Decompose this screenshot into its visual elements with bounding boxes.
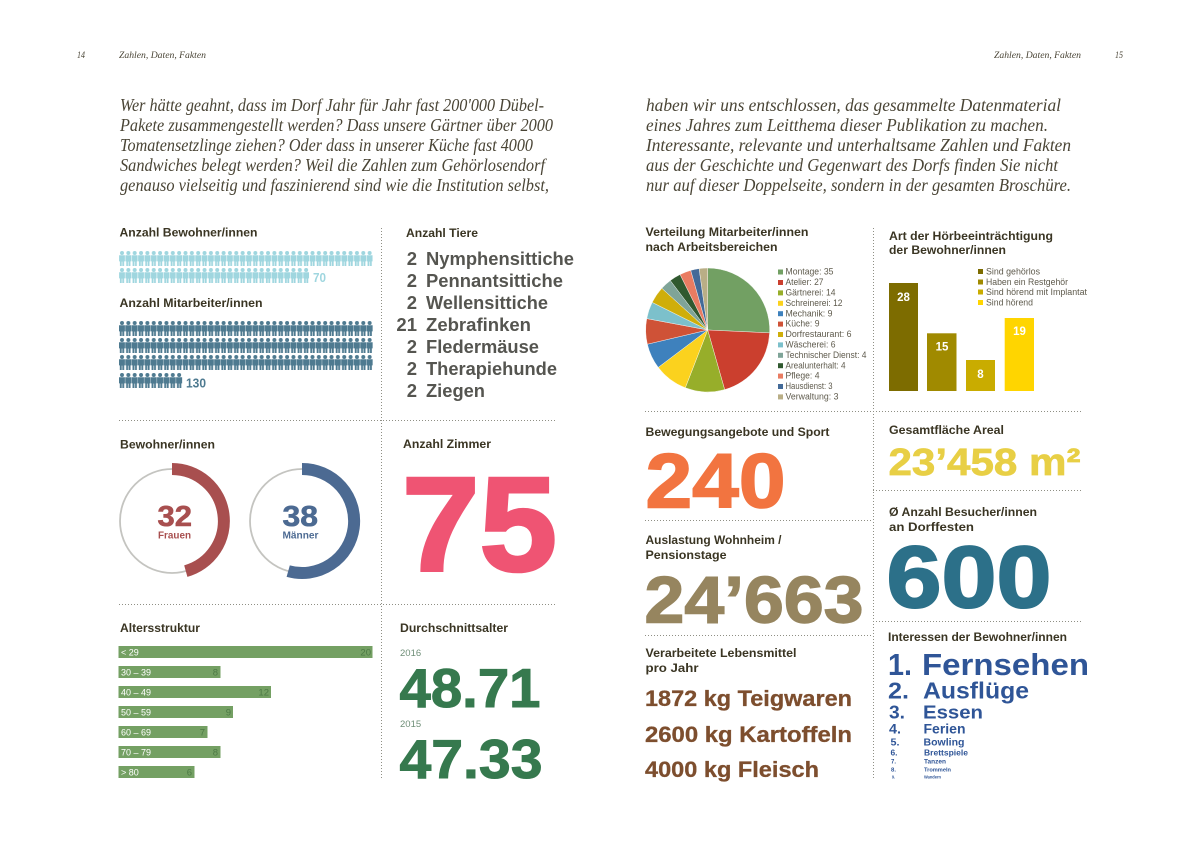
intro text left column: Sandwiches belegt werden? Weil die Zahlen zum Gehörlosendorf bbox=[120, 155, 547, 175]
bar chart: age groups: 12 bbox=[258, 688, 269, 698]
donut: Männer: Männer bbox=[282, 530, 318, 542]
pie legend: Pflege: 4 bbox=[786, 371, 820, 381]
heading: pro Jahr bbox=[646, 661, 699, 675]
animal list: 2 bbox=[407, 336, 417, 357]
bar chart: age groups: 50 – 59 bbox=[121, 708, 151, 718]
donut: Frauen: 32 bbox=[158, 501, 192, 533]
bar chart: age groups: 6 bbox=[187, 768, 192, 778]
intro text right column: haben wir uns entschlossen, das gesammelte Datenmaterial bbox=[646, 95, 1061, 115]
intro text right column: aus der Geschichte und Gegenwart des Dorfs finden Sie nicht bbox=[646, 155, 1059, 175]
big number 240: 240 bbox=[646, 438, 786, 524]
pie legend: Verwaltung: 3 bbox=[786, 392, 839, 402]
intro text left column: Tomatensetzlinge ziehen? Oder dass in unserer Küche fast 4000 bbox=[120, 135, 533, 155]
heading: Ø Anzahl Besucher/innen bbox=[889, 505, 1037, 519]
food quantities bbox=[645, 686, 852, 782]
ranked interests list: 3. bbox=[889, 702, 905, 722]
ranked interests list: Tanzen bbox=[924, 760, 946, 766]
bar chart: age groups: > 80 bbox=[121, 768, 139, 778]
ranked interests list: 5. bbox=[890, 736, 900, 748]
pie legend: Wäscherei: 6 bbox=[786, 340, 836, 350]
panel: Anzahl Besucher/innen bbox=[886, 505, 1052, 626]
heading: Anzahl Tiere bbox=[406, 226, 478, 240]
heading: Bewegungsangebote und Sport bbox=[646, 425, 830, 439]
intro text right column: nur auf dieser Doppelseite, sondern in der gesamten Broschüre. bbox=[646, 175, 1071, 195]
pie legend: Arealunterhalt: 4 bbox=[786, 360, 846, 370]
panel: Verarbeitete Lebensmittel bbox=[645, 646, 852, 782]
hearing legend bbox=[978, 266, 1088, 308]
animal list: Pennantsittiche bbox=[426, 270, 563, 291]
intro text left column: Pakete zusammengestellt werden? Dass unsere Gärtner über 2000 bbox=[119, 115, 553, 135]
pie chart bbox=[646, 268, 770, 392]
pie legend: Dorfrestaurant: 6 bbox=[786, 329, 852, 339]
page header right bbox=[994, 51, 1123, 61]
pie legend: Schreinerei: 12 bbox=[786, 298, 843, 308]
panel: Interessen der Bewohner/innen bbox=[888, 630, 1089, 780]
donut: Frauen: Frauen bbox=[158, 530, 191, 542]
heading: Altersstruktur bbox=[120, 621, 200, 635]
pie legend: Technischer Dienst: 4 bbox=[786, 350, 867, 360]
heading: Durchschnittsalter bbox=[400, 621, 508, 635]
big number area: 23’458 m² bbox=[888, 442, 1080, 484]
panel: Anzahl Mitarbeiter/innen bbox=[119, 296, 373, 390]
panel: Verteilung Mitarbeiter/innen bbox=[646, 225, 867, 402]
panel: Anzahl Bewohner/innen bbox=[119, 226, 373, 285]
panel: Durchschnittsalter bbox=[400, 621, 542, 790]
ranked interests list: 2. bbox=[888, 678, 909, 704]
food quantities: 4000 kg Fleisch bbox=[645, 757, 819, 782]
value 2016: 2016 bbox=[400, 648, 421, 659]
bar chart: hearing: 15 bbox=[936, 342, 949, 354]
big number 24'663: 24’663 bbox=[644, 563, 864, 637]
big number 600: 600 bbox=[886, 529, 1052, 626]
pie legend: Mechanik: 9 bbox=[786, 308, 833, 318]
animal list: 21 bbox=[396, 314, 417, 335]
food quantities: 1872 kg Teigwaren bbox=[645, 686, 852, 711]
heading: nach Arbeitsbereichen bbox=[646, 240, 778, 254]
bar chart: age groups: 40 – 49 bbox=[121, 688, 151, 698]
ranked interests list: Brettspiele bbox=[924, 748, 969, 758]
hearing legend: Haben ein Restgehör bbox=[986, 277, 1068, 287]
ranked interests list: Essen bbox=[923, 702, 983, 722]
animal list: 2 bbox=[407, 292, 417, 313]
panel: Bewohner/innen donuts bbox=[120, 438, 354, 573]
hearing legend: Sind hörend mit Implantat bbox=[986, 287, 1088, 297]
animal list: Therapiehunde bbox=[426, 358, 557, 379]
ranked interests list bbox=[888, 647, 1089, 780]
pictogram: 70 residents: 70 bbox=[313, 271, 326, 285]
panel: Altersstruktur bbox=[118, 621, 372, 778]
bar chart: hearing: 28 bbox=[897, 292, 910, 304]
food quantities: 2600 kg Kartoffeln bbox=[645, 722, 852, 747]
heading bbox=[646, 225, 808, 254]
heading: an Dorffesten bbox=[889, 520, 974, 534]
bar chart: age groups: 8 bbox=[213, 748, 218, 758]
heading: Anzahl Mitarbeiter/innen bbox=[120, 296, 262, 310]
ranked interests list: Ausflüge bbox=[923, 678, 1029, 704]
ranked interests list: 1. bbox=[888, 647, 912, 682]
page header right: 15 bbox=[1115, 51, 1123, 61]
value 2016: 48.71 bbox=[400, 657, 540, 719]
ranked interests list: 6. bbox=[890, 748, 898, 758]
bar chart: hearing: 19 bbox=[1013, 326, 1026, 338]
pie legend: Montage: 35 bbox=[786, 267, 834, 277]
panel: Auslastung Wohnheim bbox=[644, 533, 864, 637]
ranked interests list: 7. bbox=[891, 760, 896, 766]
panel: Gesamtfläche Areal bbox=[888, 423, 1080, 484]
bar chart: age groups: 8 bbox=[213, 668, 218, 678]
big number 75: 75 bbox=[402, 450, 557, 600]
bar chart: age groups: 7 bbox=[200, 728, 205, 738]
panel: Anzahl Zimmer bbox=[402, 437, 557, 600]
animal list: Wellensittiche bbox=[426, 292, 548, 313]
bar chart: age groups: 9 bbox=[226, 708, 231, 718]
panel: Anzahl Tiere bbox=[396, 226, 574, 401]
value 2015: 2015 bbox=[400, 719, 421, 730]
value 2015: 47.33 bbox=[400, 728, 542, 790]
bar chart: hearing bbox=[889, 283, 1034, 391]
ranked interests list: 8. bbox=[891, 768, 897, 774]
bar chart: age groups: 20 bbox=[360, 648, 371, 658]
heading: Auslastung Wohnheim / bbox=[646, 533, 782, 547]
heading bbox=[646, 533, 782, 562]
heading: Interessen der Bewohner/innen bbox=[888, 630, 1067, 644]
donut: Frauen bbox=[120, 469, 224, 573]
ranked interests list: 9. bbox=[892, 774, 895, 780]
animal list: Ziegen bbox=[426, 380, 485, 401]
ranked interests list: Wandern bbox=[924, 774, 941, 780]
heading: Bewohner/innen bbox=[120, 438, 215, 452]
intro text left column: Wer hätte geahnt, dass im Dorf Jahr für Jahr fast 200'000 Dübel- bbox=[120, 95, 544, 115]
page header left bbox=[77, 51, 206, 61]
intro text left column bbox=[119, 95, 553, 195]
pictogram: 70 residents bbox=[119, 251, 373, 285]
intro text left column: genauso vielseitig und faszinierend sind wie die Institution selbst, bbox=[120, 175, 549, 195]
animal list: Fledermäuse bbox=[426, 336, 539, 357]
animal list: 2 bbox=[407, 270, 417, 291]
ranked interests list: Fernsehen bbox=[922, 647, 1089, 682]
panel: Art der Hörbeeinträchtigung bbox=[889, 229, 1088, 391]
pictogram: 130 employees bbox=[119, 321, 373, 390]
ranked interests list: Trommeln bbox=[924, 768, 952, 774]
intro text right column: eines Jahres zum Leitthema dieser Publikation zu machen. bbox=[646, 115, 1048, 135]
bar chart: age groups bbox=[118, 646, 372, 778]
heading: der Bewohner/innen bbox=[889, 243, 1006, 257]
donut: Männer bbox=[250, 469, 354, 573]
bar chart: age groups: 30 – 39 bbox=[121, 668, 151, 678]
page header left: 14 bbox=[77, 51, 85, 61]
ranked interests list: Ferien bbox=[924, 722, 966, 736]
pie legend: Atelier: 27 bbox=[786, 277, 824, 287]
page header left: Zahlen, Daten, Fakten bbox=[119, 51, 206, 61]
animal list bbox=[396, 248, 574, 401]
heading: Verteilung Mitarbeiter/innen bbox=[646, 225, 808, 239]
animal list: 2 bbox=[407, 248, 417, 269]
donut: Männer: 38 bbox=[282, 501, 318, 533]
animal list: Nymphensittiche bbox=[426, 248, 574, 269]
bar chart: age groups: 60 – 69 bbox=[121, 728, 151, 738]
heading: Anzahl Bewohner/innen bbox=[120, 226, 258, 240]
heading: Art der Hörbeeinträchtigung bbox=[889, 229, 1053, 243]
bar chart: age groups: < 29 bbox=[121, 648, 139, 658]
heading: Gesamtfläche Areal bbox=[889, 423, 1004, 437]
heading: Pensionstage bbox=[646, 548, 727, 562]
animal list: 2 bbox=[407, 380, 417, 401]
pie legend: Gärtnerei: 14 bbox=[786, 288, 836, 298]
heading bbox=[889, 229, 1053, 257]
intro text right column: Interessante, relevante und unterhaltsame Zahlen und Fakten bbox=[645, 135, 1071, 155]
panel: Bewegungsangebote und Sport bbox=[646, 425, 830, 524]
page header right: Zahlen, Daten, Fakten bbox=[994, 51, 1081, 61]
hearing legend: Sind gehörlos bbox=[986, 266, 1041, 276]
pie legend: Küche: 9 bbox=[786, 319, 820, 329]
pictogram: 130 employees: 130 bbox=[186, 376, 206, 390]
heading: Verarbeitete Lebensmittel bbox=[646, 646, 796, 660]
ranked interests list: 4. bbox=[889, 722, 901, 736]
animal list: Zebrafinken bbox=[426, 314, 531, 335]
bar chart: hearing: 8 bbox=[977, 369, 984, 381]
pie legend bbox=[778, 267, 867, 402]
intro text right column bbox=[645, 95, 1071, 195]
bar chart: age groups: 70 – 79 bbox=[121, 748, 151, 758]
heading: Anzahl Zimmer bbox=[403, 437, 491, 451]
heading bbox=[646, 646, 796, 675]
hearing legend: Sind hörend bbox=[986, 298, 1033, 308]
heading bbox=[889, 505, 1037, 534]
ranked interests list: Bowling bbox=[924, 736, 964, 748]
pie legend: Hausdienst: 3 bbox=[786, 381, 833, 391]
animal list: 2 bbox=[407, 358, 417, 379]
